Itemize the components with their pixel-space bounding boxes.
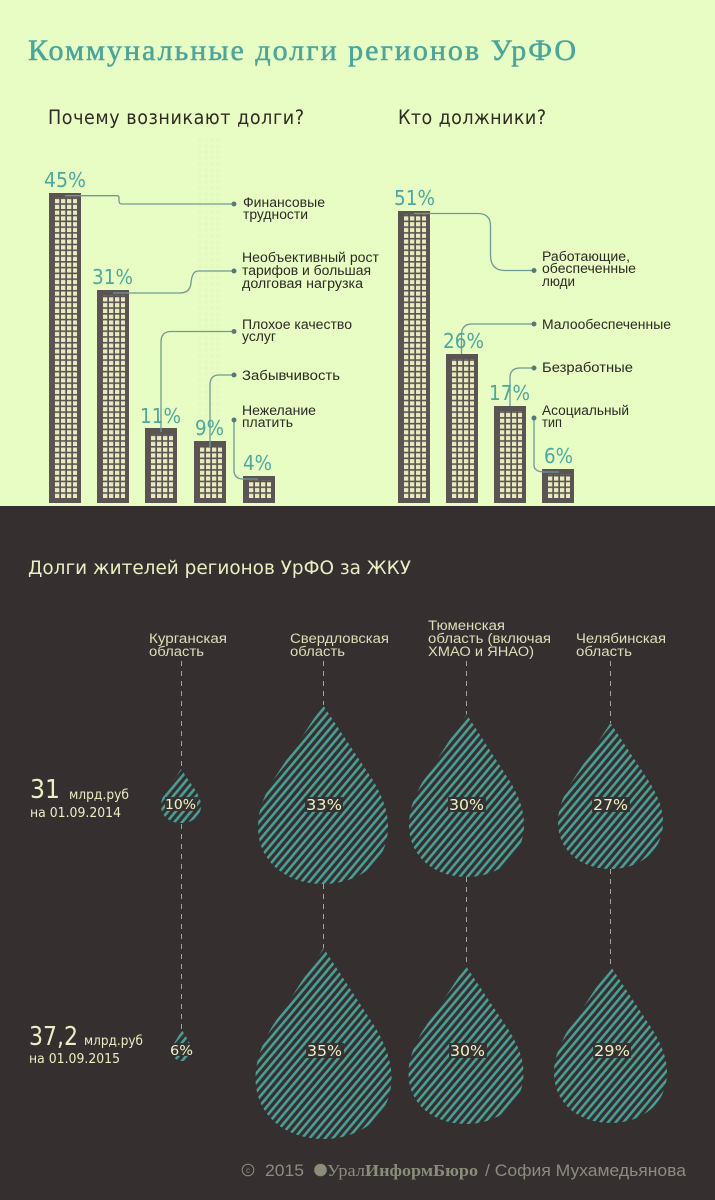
- drop: Sverdlovsk 2014: 33%: [306, 796, 342, 814]
- label: tariffs: Необъективный рост: [242, 250, 379, 265]
- label: financial difficulties: [243, 195, 325, 222]
- region label: Kurgan: область: [149, 644, 204, 659]
- label: financial difficulties: трудности: [243, 207, 308, 222]
- bar: 31%: [97, 290, 129, 503]
- region label: Tyumen: область (включая: [428, 631, 551, 646]
- footer credits: 2015: [265, 1161, 304, 1180]
- region label: Chelyabinsk: [576, 631, 666, 659]
- chart: reasons for debts: [44, 168, 379, 503]
- region label: Sverdlovsk: область: [290, 644, 345, 659]
- title: Коммунальные долги регионов УрФО: [28, 34, 576, 67]
- drop: Tyumen 2014: [409, 714, 524, 877]
- total 2014: 31: [30, 775, 60, 805]
- connector: tariffs: [113, 271, 234, 293]
- drop: Kurgan 2014: [161, 769, 201, 823]
- footer credits: / София Мухамедьянова: [485, 1161, 687, 1180]
- value: 31%: 31%: [92, 265, 133, 289]
- drop: Tyumen 2015: [408, 966, 524, 1124]
- drop: Sverdlovsk 2015: [256, 948, 392, 1139]
- region label: Sverdlovsk: [290, 631, 389, 659]
- label: working people: [542, 249, 636, 289]
- region label: Chelyabinsk: Челябинская: [576, 631, 666, 646]
- label: asocial: Асоциальный: [542, 403, 629, 418]
- label: working people: Работающие,: [542, 249, 630, 264]
- drop: Chelyabinsk 2015: 29%: [594, 1042, 630, 1060]
- value: 9%: 9%: [195, 416, 224, 440]
- label: working people: люди: [542, 274, 575, 289]
- region label: Chelyabinsk: область: [576, 644, 632, 659]
- bar: 4%: [243, 476, 275, 503]
- total 2014: млрд.руб: [69, 788, 129, 803]
- value: 6%: 6%: [544, 444, 573, 468]
- bar: 26%: [446, 354, 478, 503]
- light background panel: [0, 0, 715, 506]
- drop: Kurgan 2015: 6%: [170, 1043, 193, 1059]
- label: tariffs: тарифов и большая: [242, 263, 371, 278]
- bar: 9%: [194, 441, 226, 503]
- heading: residents' debts: Долги жителей регионов УрФО за ЖКУ: [28, 557, 411, 579]
- label: asocial: тип: [542, 415, 562, 430]
- chart: debtors: [394, 186, 671, 503]
- drop: Chelyabinsk 2014: 27%: [593, 796, 628, 814]
- dark background panel: [0, 506, 715, 1200]
- drop: Kurgan 2014: 10%: [165, 797, 196, 813]
- connector: forgetfulness: [210, 375, 234, 447]
- total 2014: [30, 775, 129, 821]
- drop: Tyumen 2015: 30%: [450, 1042, 485, 1060]
- label: forgetfulness: Забывчивость: [242, 368, 340, 383]
- label: unemployed: Безработные: [542, 360, 633, 375]
- connector: asocial: [534, 418, 559, 472]
- drop: Kurgan 2015: [170, 1030, 193, 1061]
- footer credits: [242, 1161, 687, 1180]
- label: poor quality: услуг: [242, 329, 276, 344]
- drop: Tyumen 2014: 30%: [449, 796, 484, 814]
- total 2014: на 01.09.2014: [30, 806, 121, 821]
- value: 17%: 17%: [489, 381, 530, 405]
- connector: unemployed: [510, 368, 534, 406]
- label: working people: обеспеченные: [542, 261, 636, 276]
- value: 45%: 45%: [44, 168, 86, 192]
- drop: Sverdlovsk 2014: [258, 705, 388, 884]
- value: 26%: 26%: [443, 329, 484, 353]
- bar: 17%: [494, 406, 526, 503]
- bar: 45%: [49, 193, 81, 503]
- region label: Tyumen: [428, 618, 551, 659]
- connector dots: [232, 202, 236, 422]
- drop: Chelyabinsk 2014: [558, 723, 663, 869]
- heading: who the debtors are: Кто должники?: [398, 106, 546, 129]
- label: tariffs: [242, 250, 379, 291]
- total 2015: на 01.09.2015: [29, 1052, 120, 1067]
- total 2015: млрд.руб: [84, 1034, 143, 1049]
- region label: Kurgan: [149, 631, 227, 659]
- footer credits: ИнформБюро: [365, 1161, 478, 1180]
- value: 51%: 51%: [394, 186, 435, 210]
- connector dots: [532, 268, 536, 420]
- connector: financial difficulties: [65, 196, 234, 204]
- label: financial difficulties: Финансовые: [243, 195, 325, 210]
- region label: Sverdlovsk: Свердловская: [290, 631, 389, 646]
- drop: Chelyabinsk 2015: [554, 966, 667, 1123]
- label: tariffs: долговая нагрузка: [242, 276, 364, 291]
- total 2015: 37,2: [29, 1022, 78, 1052]
- label: unwillingness to pay: Нежелание: [242, 403, 316, 418]
- connector: poor quality: [161, 332, 234, 432]
- label: poor quality: Плохое качество: [242, 317, 352, 332]
- label: unwillingness to pay: платить: [242, 415, 293, 430]
- total 2015: [29, 1022, 143, 1067]
- region label: Tyumen: Тюменская: [428, 618, 505, 633]
- bar: 51%: [398, 211, 430, 503]
- bar: 11%: [145, 428, 177, 503]
- footer credits: c: [246, 1166, 250, 1175]
- region label: Kurgan: Курганская: [149, 631, 227, 646]
- bar: 6%: [542, 469, 574, 503]
- label: low-income: Малообеспеченные: [542, 317, 671, 332]
- connector: unwillingness to pay: [234, 420, 258, 479]
- region label: Tyumen: ХМАО и ЯНАО): [428, 644, 534, 659]
- drop: Sverdlovsk 2015: 35%: [307, 1042, 342, 1060]
- label: poor quality: [242, 317, 352, 344]
- connector: working people: [414, 214, 534, 270]
- label: unwillingness to pay: [242, 403, 316, 430]
- footer credits: Урал: [327, 1161, 366, 1180]
- connector: low-income: [462, 324, 534, 354]
- value: 4%: 4%: [243, 451, 272, 475]
- heading: why debts arise: Почему возникают долги?: [48, 106, 304, 129]
- value: 11%: 11%: [140, 404, 181, 428]
- label: asocial: [542, 403, 629, 430]
